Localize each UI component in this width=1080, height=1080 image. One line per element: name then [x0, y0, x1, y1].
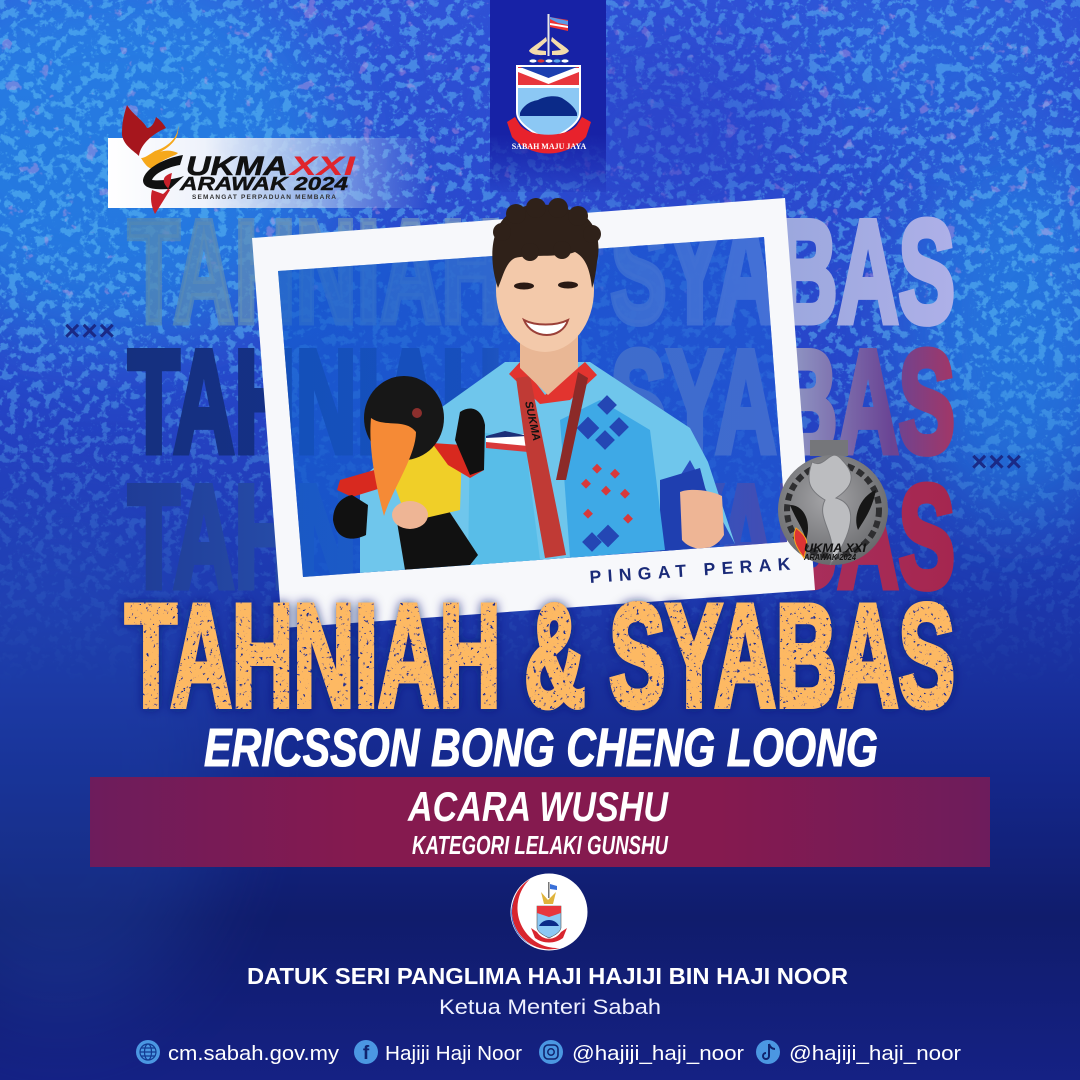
icon: silver medal: UKMA XXI	[804, 541, 867, 555]
neck	[520, 330, 578, 395]
icon: tiktok	[756, 1040, 780, 1064]
photo caption: pingat perak: PINGAT PERAK	[589, 554, 791, 587]
mascot hand	[392, 501, 428, 529]
photo: athlete	[360, 198, 735, 575]
icon: shield	[516, 65, 581, 141]
facebook name: Hajiji Haji Noor	[385, 1042, 522, 1065]
website: cm.sabah.gov.my	[168, 1042, 340, 1065]
eye	[412, 408, 422, 418]
beak	[370, 418, 416, 516]
chief minister title: Ketua Menteri Sabah	[439, 996, 661, 1019]
icon: silver medal	[778, 440, 888, 565]
text: ARAWAK 2024: ARAWAK 2024	[179, 174, 348, 194]
diamond pattern on jacket	[577, 395, 629, 552]
tiktok handle: @hajiji_haji_noor	[789, 1042, 961, 1065]
icon: crest arms	[529, 37, 569, 55]
text: XXI: XXI	[287, 151, 356, 181]
medal logo	[794, 528, 807, 558]
face	[496, 252, 594, 352]
top band with Sabah crest	[490, 0, 606, 192]
icon: crest wreath	[529, 59, 569, 63]
cape and jacket	[360, 362, 735, 575]
icon: globe	[136, 1040, 160, 1064]
panel: polaroid photo frame	[252, 198, 815, 628]
icon: torch flame	[122, 105, 184, 214]
shirt	[396, 446, 462, 518]
event category: KATEGORI LELAKI GUNSHU	[412, 830, 669, 860]
text: UKMA: UKMA	[186, 151, 288, 181]
athlete name: ERICSSON BONG CHENG LOONG	[204, 718, 878, 778]
medal ribbon	[516, 372, 588, 558]
icon: silver medal: ARAWAK 2024	[803, 553, 857, 562]
icon: facebook: f	[363, 1043, 370, 1064]
chief minister name: DATUK SERI PANGLIMA HAJI HAJIJI BIN HAJI NOOR	[247, 963, 848, 989]
icon: Hala Tuju round emblem	[510, 874, 588, 950]
curly hair	[492, 198, 601, 288]
photo: mascot hornbill	[333, 376, 485, 570]
text: tagline: SEMANGAT PERPADUAN MEMBARA	[192, 194, 336, 201]
icon: motto ribbon: SABAH MAJU JAYA	[512, 142, 586, 151]
head	[364, 376, 444, 460]
Sukma XXI Sarawak 2024 logo	[108, 105, 430, 214]
decorative cross marks left: ×××	[64, 315, 116, 346]
icon: instagram	[539, 1040, 563, 1064]
hand	[680, 490, 724, 549]
event name: ACARA WUSHU	[407, 783, 669, 830]
panel: event band	[90, 777, 990, 867]
arms	[333, 495, 368, 539]
social links row	[136, 1040, 961, 1065]
photo window tint	[278, 237, 787, 577]
instagram handle: @hajiji_haji_noor	[572, 1042, 744, 1065]
icon: facebook	[354, 1040, 378, 1064]
ghost text rows: tahniah and syabas	[128, 190, 955, 618]
eyes	[514, 282, 578, 290]
smile	[524, 320, 568, 335]
icon: flag on pole	[548, 14, 568, 56]
decorative cross marks right: ×××	[971, 446, 1023, 477]
chest flag badge	[486, 434, 526, 446]
icon: motto ribbon	[507, 117, 591, 154]
medal ribbon: SUKMA	[522, 400, 542, 442]
